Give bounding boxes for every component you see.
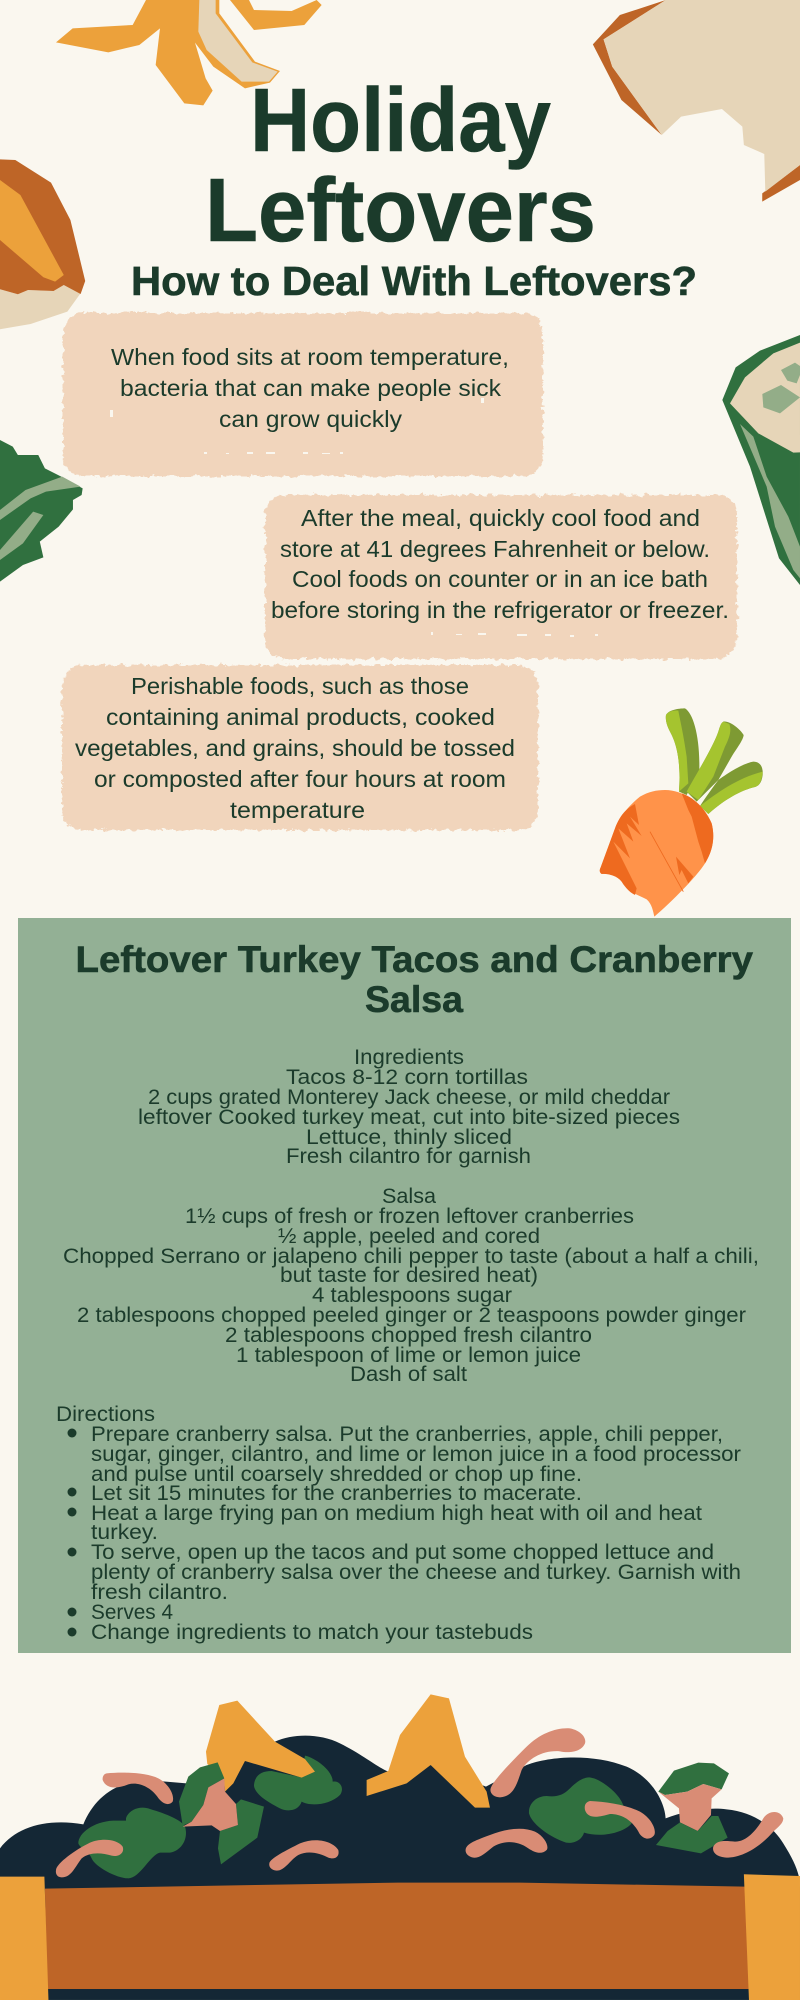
ingredients list: Fresh cilantro for garnish bbox=[286, 1145, 531, 1168]
directions: Change ingredients to match your tastebuds bbox=[91, 1621, 533, 1644]
ingredients list: Ingredients bbox=[354, 1046, 464, 1069]
text: perishable foods bbox=[75, 673, 515, 823]
recipe heading: Salsa bbox=[365, 979, 463, 1020]
text: perishable foods: or composted after four hours at room bbox=[94, 766, 506, 792]
text: cool food bbox=[271, 505, 729, 623]
panel: room temperature bbox=[63, 313, 543, 476]
directions: Prepare cranberry salsa. Put the cranberries, apple, chili pepper, bbox=[91, 1423, 723, 1446]
directions: Serves 4 bbox=[91, 1601, 173, 1624]
directions: Directions bbox=[56, 1403, 155, 1426]
directions bbox=[56, 1403, 741, 1644]
text: perishable foods: temperature bbox=[230, 797, 365, 823]
salsa list: Salsa bbox=[382, 1185, 436, 1208]
salsa list: 4 tablespoons sugar bbox=[312, 1284, 512, 1307]
salsa list: 2 tablespoons chopped fresh cilantro bbox=[225, 1324, 592, 1347]
icon: pumpkin slice left bbox=[0, 159, 85, 329]
text: room temperature: can grow quickly bbox=[219, 406, 402, 432]
ingredients list: leftover Cooked turkey meat, cut into bite-sized pieces bbox=[138, 1106, 680, 1129]
subtitle: How to Deal With Leftovers? bbox=[131, 258, 697, 304]
salsa list: Dash of salt bbox=[350, 1363, 467, 1386]
icon: banana peel top bbox=[56, 0, 322, 105]
text: perishable foods: Perishable foods, such as those bbox=[131, 673, 469, 699]
salsa list bbox=[63, 1185, 759, 1386]
icon: torn beige scrap top right bbox=[593, 0, 800, 202]
ingredients list: Tacos 8-12 corn tortillas bbox=[286, 1066, 528, 1089]
compost pile and left scraps bbox=[0, 1694, 800, 1897]
text: cool food: Cool foods on counter or in an ice bath bbox=[292, 566, 708, 592]
ingredients list: 2 cups grated Monterey Jack cheese, or mild cheddar bbox=[148, 1086, 670, 1109]
salsa list: but taste for desired heat) bbox=[280, 1264, 538, 1287]
recipe heading: Leftover Turkey Tacos and Cranberry bbox=[76, 939, 753, 980]
directions: sugar, ginger, cilantro, and lime or lemon juice in a food processor bbox=[91, 1443, 741, 1466]
salsa list: 1 tablespoon of lime or lemon juice bbox=[236, 1344, 581, 1367]
recipe heading bbox=[76, 939, 753, 1020]
icon: green squash right bbox=[722, 335, 800, 585]
panel: cool food bbox=[265, 495, 737, 659]
text: perishable foods: vegetables, and grains, should be tossed bbox=[75, 735, 515, 761]
directions: plenty of cranberry salsa over the cheese and turkey. Garnish with bbox=[91, 1561, 741, 1584]
directions: and pulse until coarsely shredded or chop up fine. bbox=[91, 1463, 582, 1486]
text: cool food: store at 41 degrees Fahrenheit or below. bbox=[280, 536, 710, 562]
bin bbox=[0, 1874, 800, 2000]
illustration: compost bin bbox=[0, 1694, 800, 2000]
salsa list: Chopped Serrano or jalapeno chili pepper to taste (about a half a chili, bbox=[63, 1245, 759, 1268]
directions: Let sit 15 minutes for the cranberries to macerate. bbox=[91, 1482, 582, 1505]
title: Leftovers bbox=[205, 161, 596, 261]
panel: perishable foods bbox=[62, 665, 538, 830]
title: Holiday bbox=[250, 71, 551, 171]
salsa list: 2 tablespoons chopped peeled ginger or 2 teaspoons powder ginger bbox=[77, 1304, 746, 1327]
icon: carrot bbox=[600, 708, 763, 917]
salsa list: ½ apple, peeled and cored bbox=[278, 1225, 540, 1248]
salsa list: 1½ cups of fresh or frozen leftover cranberries bbox=[185, 1205, 634, 1228]
directions: Heat a large frying pan on medium high heat with oil and heat bbox=[91, 1502, 702, 1525]
text: cool food: before storing in the refrigerator or freezer. bbox=[271, 597, 729, 623]
ingredients list bbox=[138, 1046, 680, 1168]
title bbox=[205, 71, 596, 261]
text: room temperature: bacteria that can make people sick bbox=[120, 375, 501, 401]
panel: recipe bbox=[18, 918, 791, 1653]
right scraps bbox=[466, 1728, 783, 1858]
directions: To serve, open up the tacos and put some chopped lettuce and bbox=[91, 1541, 714, 1564]
directions: fresh cilantro. bbox=[91, 1581, 228, 1604]
text: perishable foods: containing animal products, cooked bbox=[106, 704, 495, 730]
ingredients list: Lettuce, thinly sliced bbox=[306, 1126, 512, 1149]
text: room temperature bbox=[111, 344, 509, 432]
directions: turkey. bbox=[91, 1521, 158, 1544]
text: room temperature: When food sits at room temperature, bbox=[111, 344, 509, 370]
icon: green leaf left bbox=[0, 440, 83, 582]
text: cool food: After the meal, quickly cool food and bbox=[301, 505, 700, 531]
